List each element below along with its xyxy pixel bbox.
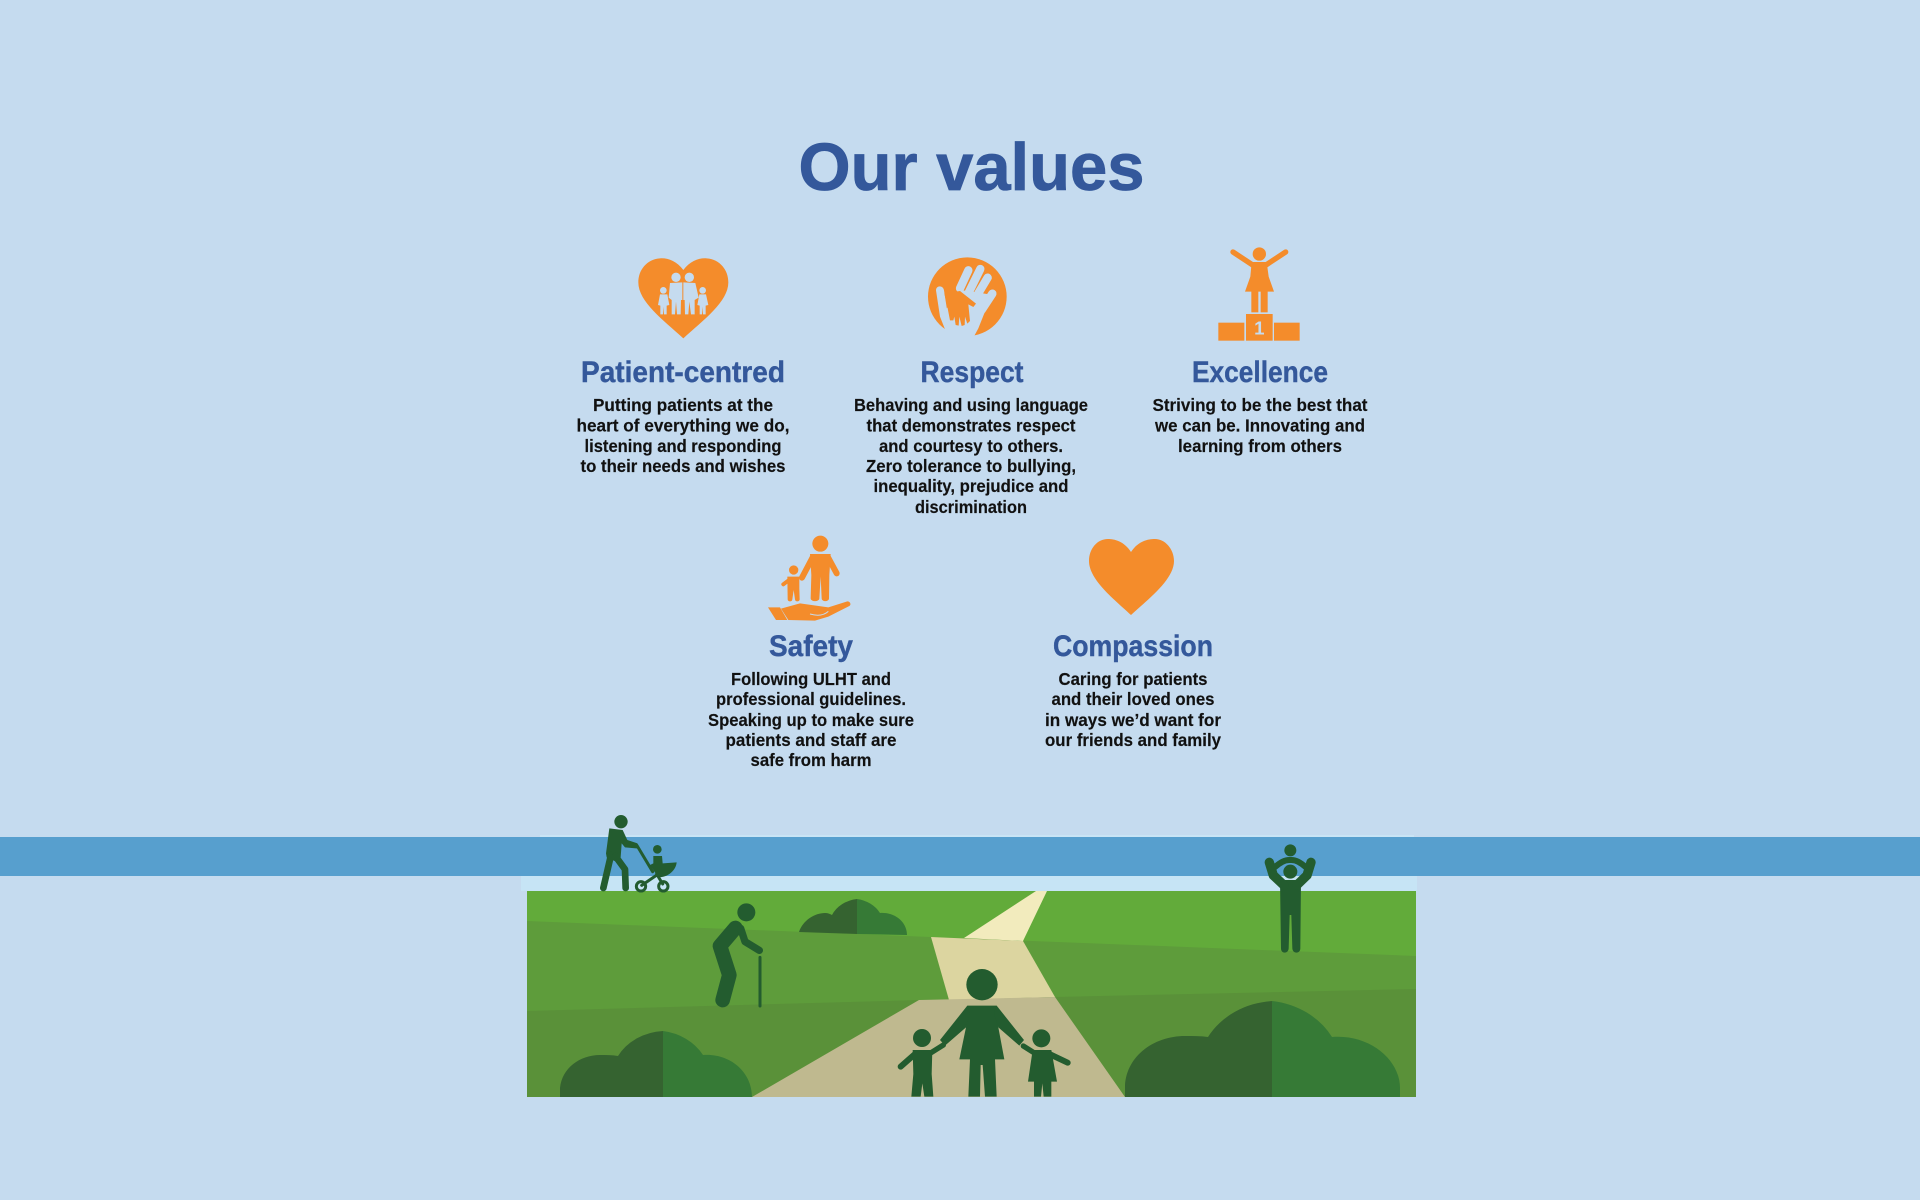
bush: right [1125, 1001, 1400, 1097]
path [752, 891, 1125, 1097]
text block: patients and staff are [726, 730, 897, 750]
text block: and courtesy to others. [879, 436, 1063, 456]
text block [576, 395, 790, 476]
heading: Excellence [1192, 356, 1328, 389]
icon: heart with family [638, 258, 728, 338]
text block: Speaking up to make sure [708, 710, 914, 730]
text block: discrimination [915, 497, 1027, 517]
text block [1152, 395, 1368, 456]
bush: small [799, 899, 907, 935]
figure: older person with cane [720, 903, 760, 1006]
text block: Putting patients at the [593, 395, 773, 415]
heading: Respect [920, 356, 1024, 389]
panel: compassion [1045, 539, 1221, 750]
bush: left [560, 1031, 752, 1097]
text block: Zero tolerance to bullying, [866, 456, 1076, 476]
text block: learning from others [1178, 436, 1342, 456]
text block: Behaving and using language [854, 395, 1088, 415]
text block: Striving to be the best that [1152, 395, 1368, 415]
landscape scene [527, 891, 1416, 1097]
text block: in ways we’d want for [1045, 710, 1221, 730]
text block: and their loved ones [1052, 689, 1215, 709]
text block: our friends and family [1045, 730, 1221, 750]
text block: professional guidelines. [716, 689, 906, 709]
panel: safety [708, 536, 914, 770]
heading: Patient-centred [581, 356, 785, 389]
text block: inequality, prejudice and [874, 476, 1068, 496]
icon: heart [1089, 539, 1174, 615]
text block: listening and responding [584, 436, 782, 456]
heading: Compassion [1053, 630, 1213, 663]
text block: Following ULHT and [731, 669, 891, 689]
panel: patient-centred [576, 258, 790, 476]
text block [708, 669, 914, 770]
panel: respect [854, 257, 1088, 517]
figure: parent with two children [901, 969, 1068, 1097]
figure: person pushing pram [603, 815, 677, 891]
text block: that demonstrates respect [866, 416, 1076, 436]
text block: to their needs and wishes [580, 456, 786, 476]
text block: safe from harm [750, 750, 872, 770]
horizon band [0, 835, 1920, 891]
text block [854, 395, 1088, 517]
heading: Safety [769, 630, 853, 663]
text block: Caring for patients [1058, 669, 1208, 689]
title: Our values [798, 130, 1144, 205]
icon: hands in circle [928, 257, 1007, 343]
icon: figure on podium [1218, 247, 1300, 341]
icon: figure on podium: 1 [1254, 318, 1265, 339]
text block: we can be. Innovating and [1154, 416, 1365, 436]
panel: excellence [1152, 247, 1368, 456]
icon: hand holding adult and child [768, 536, 850, 621]
text block [1045, 669, 1221, 750]
figure: adult with child on shoulders [1269, 844, 1311, 953]
text block: heart of everything we do, [576, 416, 790, 436]
